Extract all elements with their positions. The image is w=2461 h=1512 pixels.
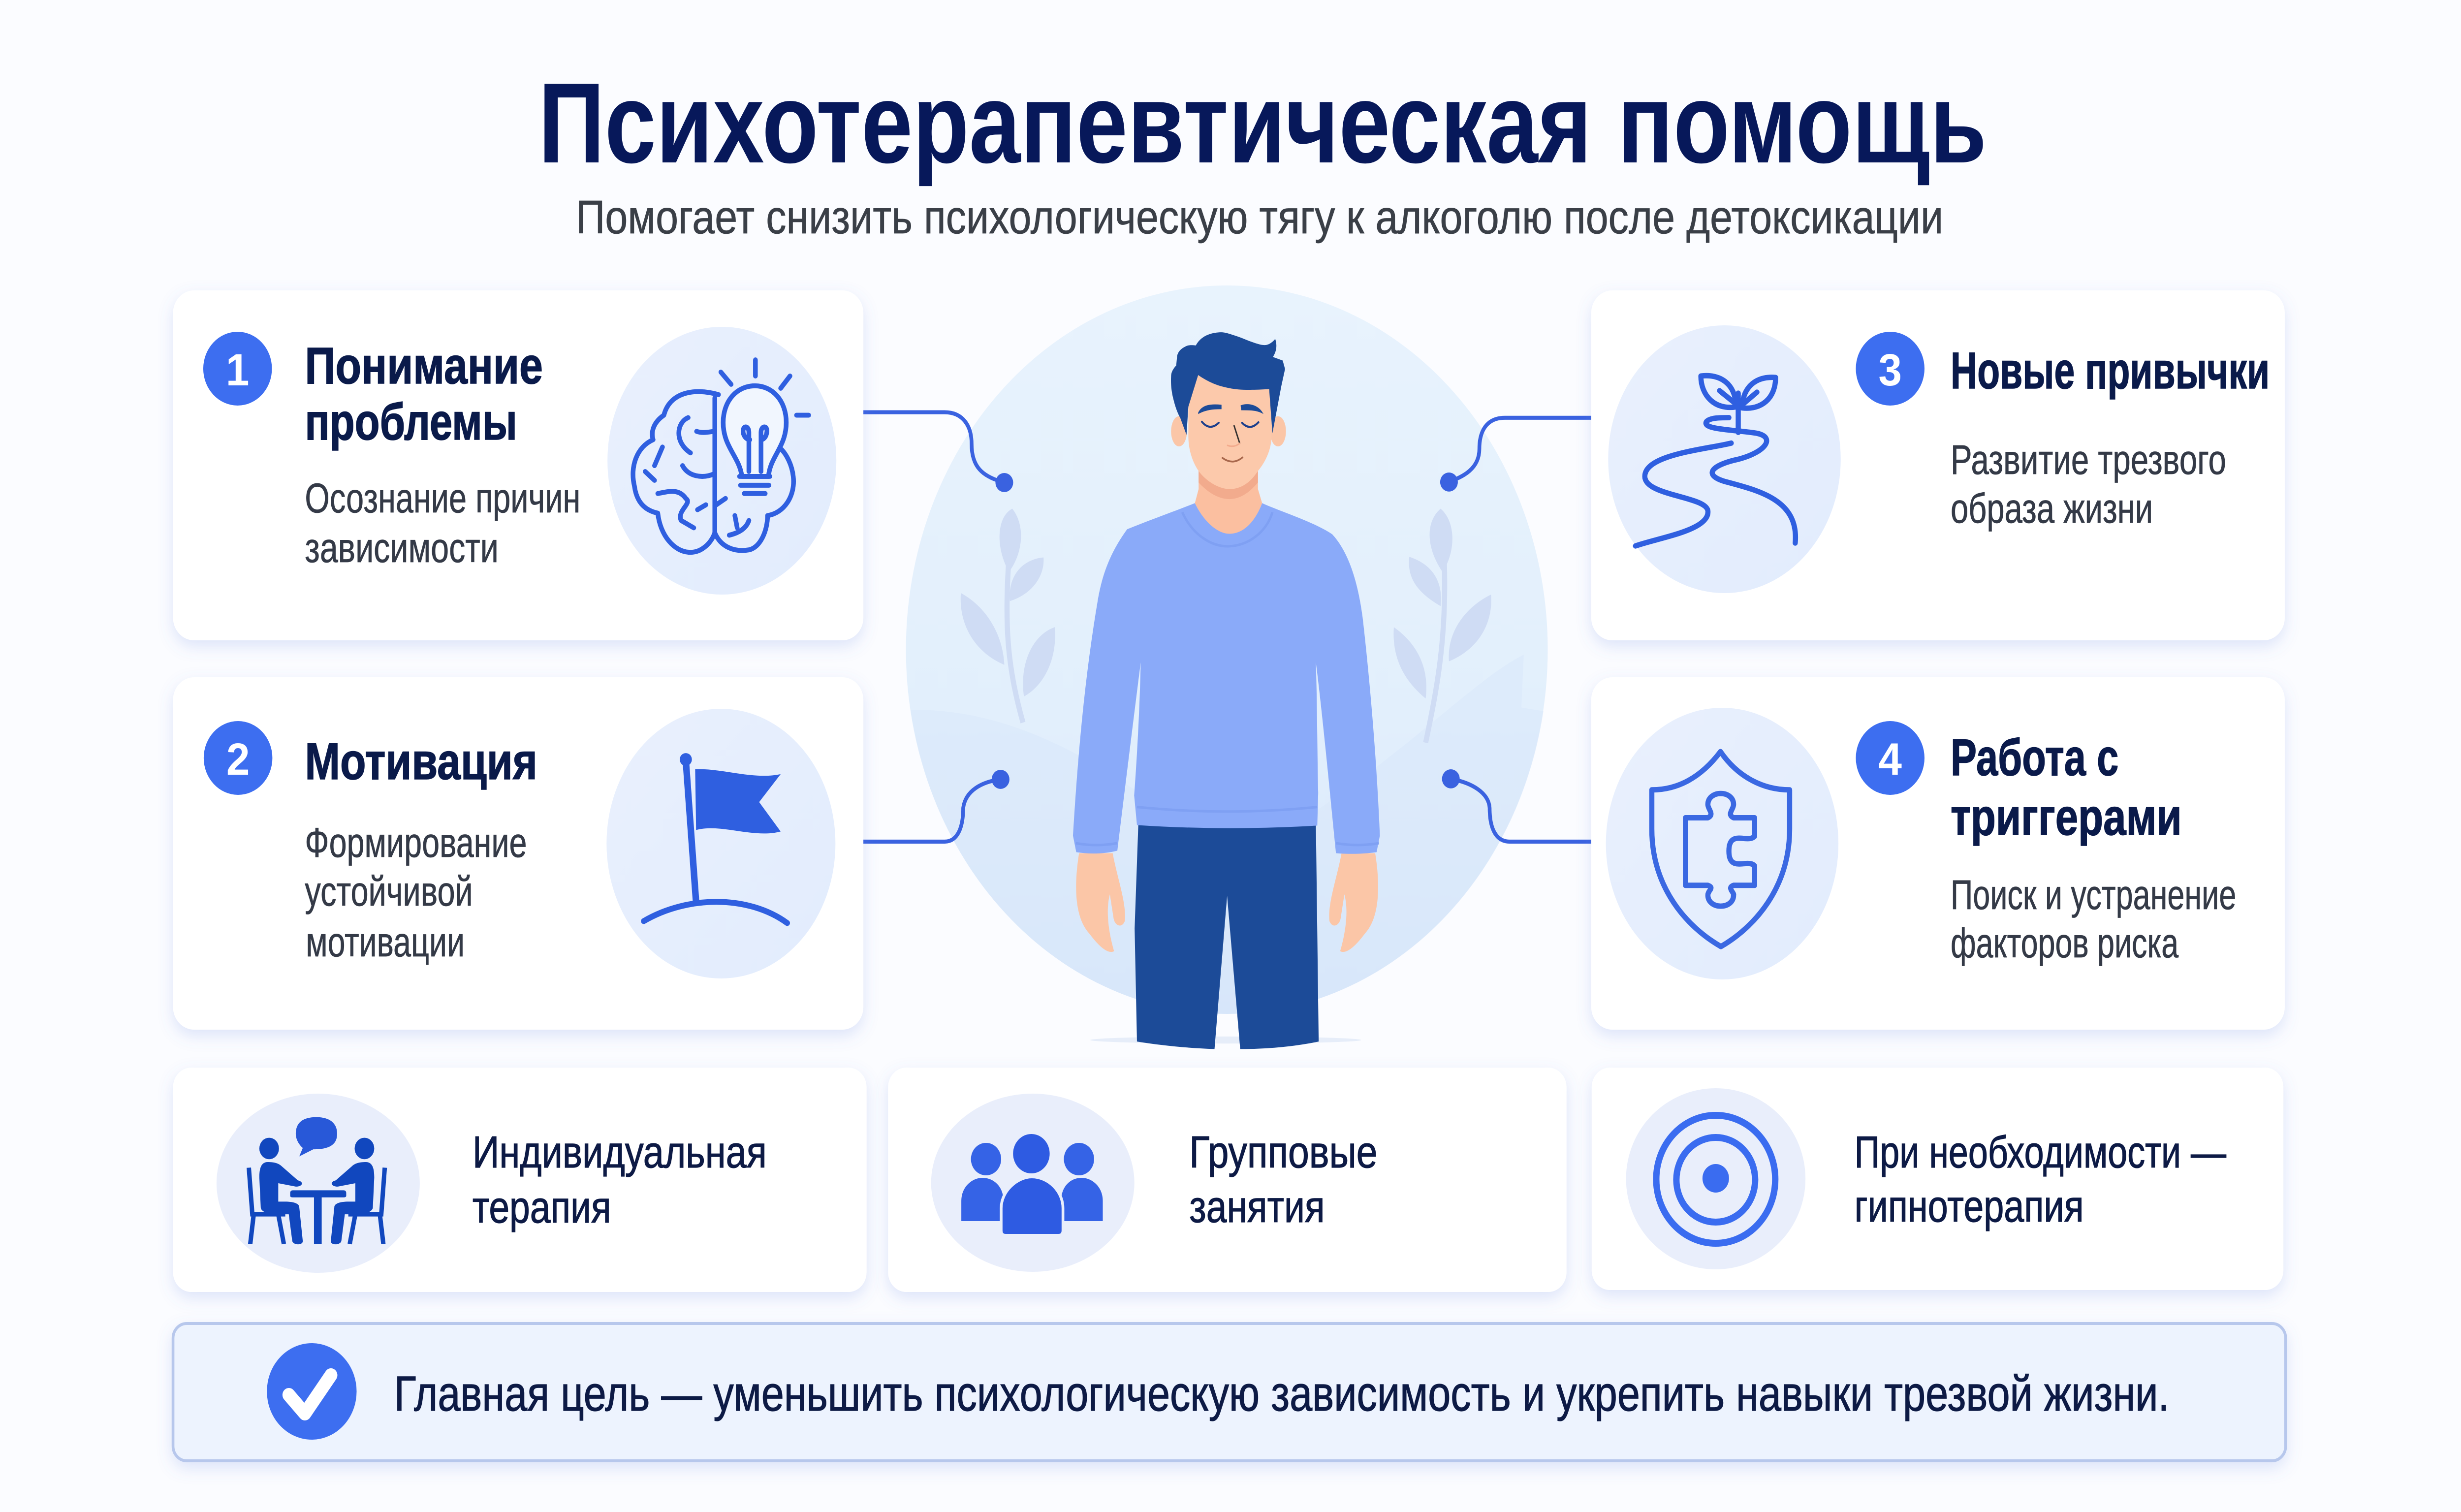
trousers <box>1135 823 1319 1049</box>
icon circle <box>931 1094 1135 1272</box>
icon circle <box>217 1094 420 1273</box>
card <box>173 1068 867 1292</box>
icon circle <box>606 709 835 978</box>
label: При необходимости — <box>1855 1127 2226 1177</box>
background circle <box>906 285 1548 1014</box>
card <box>1591 677 2285 1030</box>
right person <box>331 1138 385 1244</box>
heading: Мотивация <box>305 733 537 790</box>
icon circle <box>1608 325 1841 593</box>
neck <box>1195 462 1262 535</box>
panel: гипнотерапия <box>1592 1068 2283 1290</box>
neck shadow <box>1199 471 1258 499</box>
number badge 3: 3 <box>1878 345 1902 395</box>
label: терапия <box>473 1182 611 1232</box>
heading <box>1951 729 2182 846</box>
connector 1 <box>863 412 1013 492</box>
label: гипнотерапия <box>1855 1181 2084 1231</box>
label: занятия <box>1189 1181 1325 1232</box>
speech bubble <box>296 1117 337 1157</box>
panel: групповые занятия <box>888 1068 1567 1292</box>
label: Индивидуальная <box>473 1127 767 1177</box>
subtitle: Помогает снизить психологическую тягу к алкоголю после детоксикации <box>576 190 1943 244</box>
description: Поиск и устранение <box>1951 872 2236 918</box>
description <box>305 475 580 571</box>
number badge 2: 2 <box>226 734 250 785</box>
heading: Понимание <box>305 337 543 395</box>
description <box>1951 872 2236 967</box>
description <box>305 820 527 966</box>
label <box>473 1127 767 1232</box>
left person <box>249 1138 303 1244</box>
panel: новые привычки <box>1591 290 2285 640</box>
description: зависимости <box>305 525 499 571</box>
description: образа жизни <box>1951 486 2153 532</box>
label <box>1189 1127 1378 1232</box>
number badge 1: 1 <box>226 345 249 395</box>
number badge 4: 4 <box>1878 734 1902 785</box>
banner background <box>173 1323 2286 1461</box>
right hand <box>1329 853 1378 952</box>
connector 4 <box>1442 769 1591 842</box>
left hand <box>1076 853 1125 952</box>
icon: group of people <box>961 1134 1103 1235</box>
number badge 1 <box>203 332 272 406</box>
card <box>1591 290 2285 640</box>
sweater <box>1073 503 1380 854</box>
panel: работа с триггерами <box>1591 677 2285 1030</box>
icon: concentric target <box>1656 1115 1775 1243</box>
description: устойчивой <box>305 869 473 915</box>
card <box>888 1068 1567 1292</box>
closed eyes and brows <box>1199 405 1262 462</box>
connector lines <box>863 412 1591 842</box>
sweater details <box>1076 512 1379 845</box>
label <box>1855 1127 2226 1231</box>
central illustration: man in circle <box>903 285 1552 1049</box>
description: факторов риска <box>1951 920 2179 967</box>
table <box>290 1190 346 1244</box>
hair <box>1171 332 1285 435</box>
label: Групповые <box>1189 1127 1378 1177</box>
heading: проблемы <box>305 393 517 451</box>
callout: main goal banner <box>173 1323 2286 1461</box>
icon: brain and light bulb <box>633 360 809 552</box>
icon circle <box>1606 708 1838 979</box>
panel: мотивация <box>173 677 863 1030</box>
heading: Новые привычки <box>1951 342 2270 400</box>
left plant <box>961 508 1055 723</box>
icon: flag on a hill <box>644 753 787 923</box>
heading: Работа с <box>1951 729 2118 787</box>
number badge 4 <box>1856 721 1925 795</box>
card <box>1592 1068 2283 1290</box>
ground shadow <box>1090 1037 1361 1043</box>
soft hills <box>1318 711 1544 999</box>
description: Формирование <box>305 820 527 866</box>
banner text: Главная цель — уменьшить психологическую зависимость и укрепить навыки трезвой жизни. <box>394 1367 2170 1421</box>
description: Осознание причин <box>305 475 580 522</box>
description <box>1951 437 2226 532</box>
card <box>173 290 863 640</box>
panel: индивидуальная терапия <box>173 1068 867 1292</box>
heading <box>305 337 543 451</box>
icon: shield with puzzle piece <box>1652 752 1790 946</box>
right plant <box>1393 508 1491 743</box>
icon circle <box>607 327 836 595</box>
description: мотивации <box>306 919 465 966</box>
icon: check mark <box>267 1343 357 1440</box>
icon circle <box>1626 1088 1805 1269</box>
number badge 3 <box>1856 332 1925 406</box>
person figure and plants <box>961 332 1544 1049</box>
card <box>173 677 863 1030</box>
panel: понимание проблемы <box>173 290 863 640</box>
connector 2 <box>863 770 1010 842</box>
heading: триггерами <box>1951 788 2182 846</box>
ears <box>1171 416 1187 446</box>
icon: winding path with sprout <box>1636 376 1796 546</box>
face <box>1188 371 1271 489</box>
connector 3 <box>1440 418 1591 492</box>
title: Психотерапевтическая помощь <box>538 60 1987 187</box>
description: Развитие трезвого <box>1951 437 2226 483</box>
icon: two people at table <box>249 1117 385 1244</box>
number badge 2 <box>204 721 272 795</box>
